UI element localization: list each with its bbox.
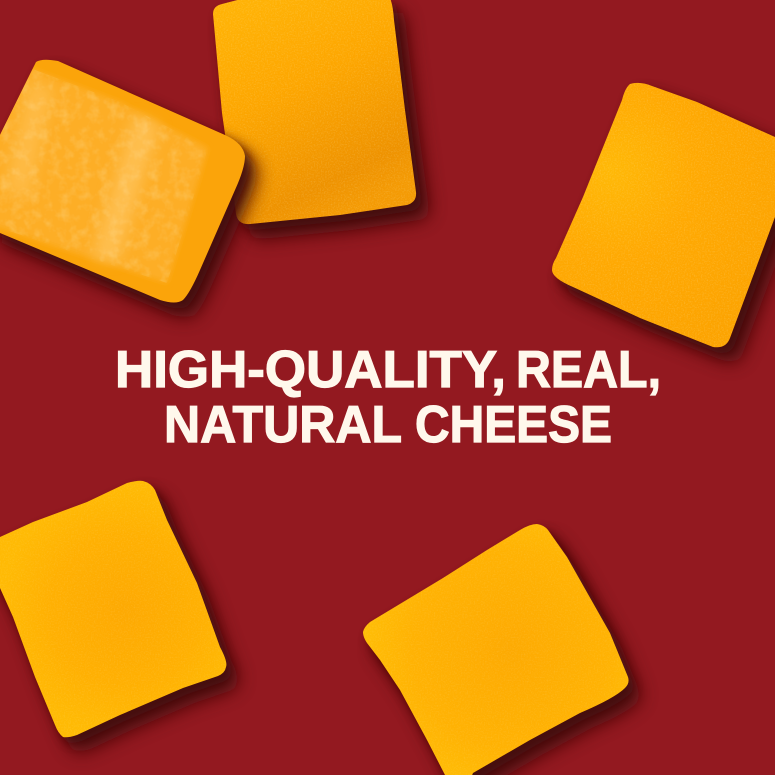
title: REAL, [516,341,661,399]
title: NATURAL [164,396,402,454]
cheese cube: top right [552,83,775,362]
cheese cube: top centre [213,0,429,239]
cheese cube: top left [0,60,257,317]
cheese cube: bottom centre [363,524,641,775]
title: HIGH-QUALITY, [115,341,506,399]
title: CHEESE [415,396,612,454]
cube top face [0,68,208,283]
title [115,341,661,454]
cheese cube: bottom left [0,481,238,752]
